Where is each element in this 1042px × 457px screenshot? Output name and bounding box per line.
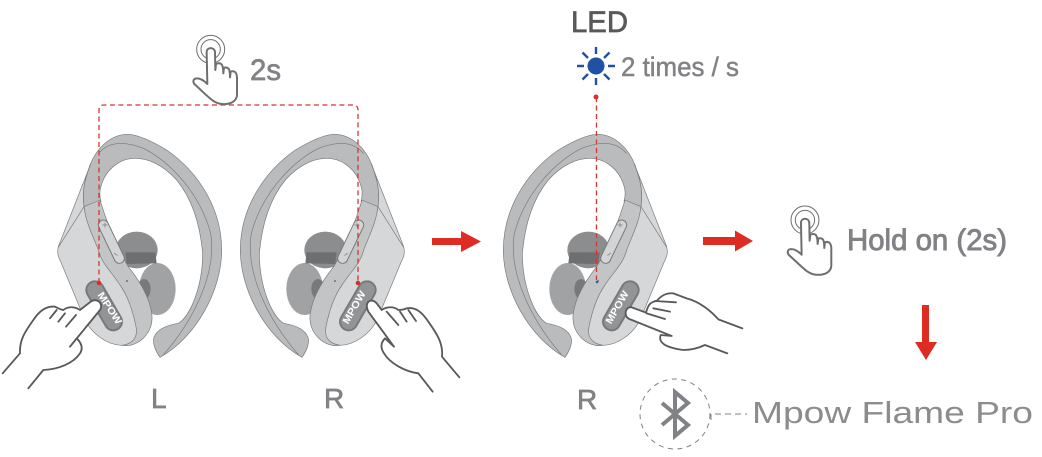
dashed connector to device name (711, 414, 747, 420)
hand: right press (367, 301, 459, 392)
label: R second: R (577, 384, 597, 415)
heading: LED: LED (571, 6, 628, 39)
label: Hold on (2s): Hold on (2s) (847, 224, 1007, 257)
label: device name: Mpow Flame Pro (752, 395, 1033, 430)
arrow: step 2 to 3 (703, 230, 753, 252)
earbud: left (58, 134, 222, 357)
dashed connector between both buttons (97, 105, 360, 285)
icon: blue LED sun (577, 47, 615, 85)
hand: left press (3, 300, 101, 388)
icon: tap hand hold (788, 206, 831, 275)
earbud body (58, 134, 222, 357)
label: R: R (324, 383, 344, 414)
label: 2 times / s: 2 times / s (621, 52, 739, 82)
MPOW logo: MPOW (95, 291, 124, 327)
MPOW logo: MPOW (341, 289, 369, 326)
hand: LED step press (626, 293, 742, 353)
arrow: step 1 to 2 (432, 231, 481, 252)
label: L: L (151, 383, 167, 414)
icon: bluetooth in dashed circle (640, 379, 710, 449)
MPOW logo: MPOW (604, 289, 632, 326)
icon: tap hand 2s (193, 35, 237, 104)
earbud body (503, 134, 667, 357)
earbud body (240, 134, 404, 357)
dashed LED leader line (594, 94, 598, 283)
earbud: LED step (503, 134, 667, 357)
earbud: right (240, 134, 404, 357)
label: 2s: 2s (250, 54, 281, 87)
arrow: down to pairing (915, 305, 937, 360)
